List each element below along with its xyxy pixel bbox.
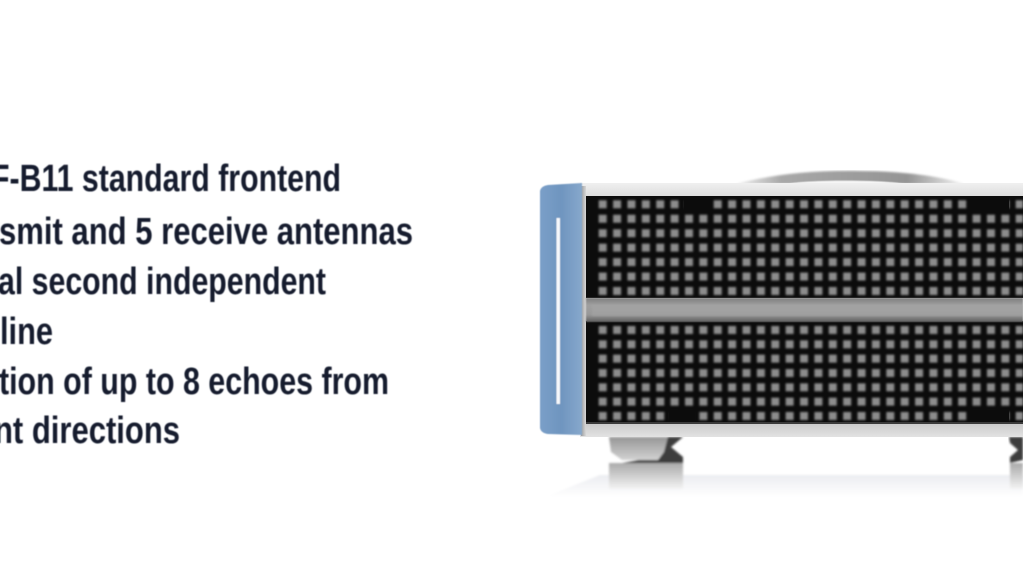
- right foot shadow notch: [1009, 437, 1023, 463]
- frame left edge: [581, 186, 586, 436]
- bottom dot grid: [598, 326, 1023, 421]
- line: echoes: tion of up to 8 echoes from: [0, 361, 389, 403]
- panel bottom dark edge: [586, 422, 1023, 424]
- left foot: [609, 437, 683, 489]
- foot reflection: [609, 463, 683, 489]
- right foot reflection: [1010, 463, 1023, 489]
- centre grey strip: [586, 298, 1023, 322]
- black front panel bottom: [586, 321, 1023, 424]
- right foot: [1009, 437, 1023, 489]
- blue side handle: [540, 183, 582, 435]
- feature list text: [0, 158, 413, 452]
- carrying handle: [735, 171, 965, 184]
- line: standard frontend: F-B11 standard frontend: [0, 158, 341, 200]
- foot body: [609, 437, 668, 460]
- line: line: line: [0, 311, 53, 353]
- dot grids: [598, 200, 1023, 421]
- line: transmit and receive antennas: smit and 5 receive antennas: [0, 211, 413, 253]
- foot shadow notch: [622, 437, 683, 463]
- silver frame: [580, 183, 1023, 437]
- gaps in dot grid: [669, 198, 1009, 422]
- floor shadow: [545, 475, 1023, 497]
- white slot: [556, 218, 560, 404]
- handle inner highlight: [788, 181, 905, 184]
- instrument product photo: [540, 171, 1023, 497]
- top dot grid: [598, 200, 1023, 297]
- strip highlight: [592, 305, 1023, 316]
- line: second independent: al second independent: [0, 261, 326, 303]
- black front panel top: [586, 196, 1023, 298]
- line: directions: nt directions: [0, 410, 180, 452]
